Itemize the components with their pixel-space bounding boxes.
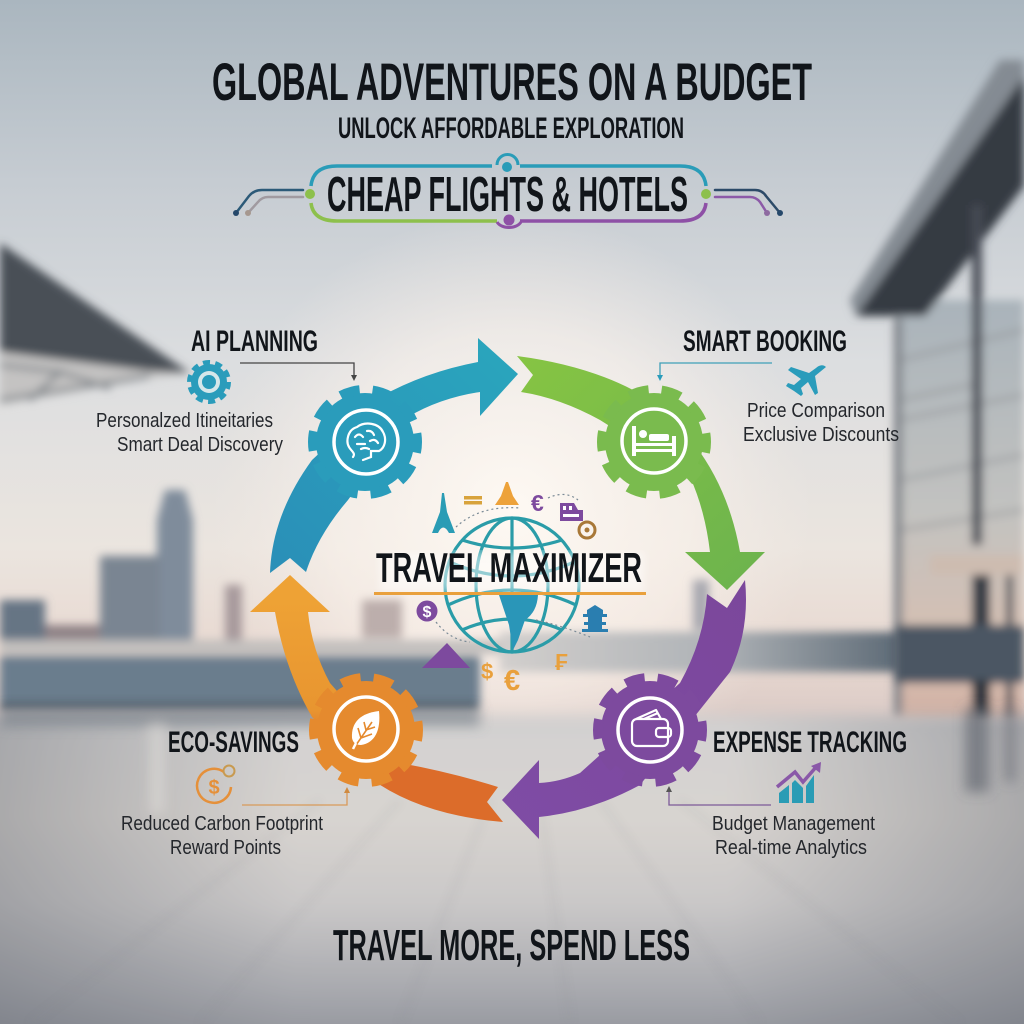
panel: eco-savings: Reward Points xyxy=(170,837,281,859)
gear: expense tracking xyxy=(598,678,702,782)
subtitle: UNLOCK AFFORDABLE EXPLORATION xyxy=(338,112,684,145)
panel: expense tracking: Budget Management xyxy=(712,813,875,835)
globe xyxy=(445,518,579,652)
panel: eco-savings: Reduced Carbon Footprint xyxy=(121,813,323,835)
panel: AI planning: AI PLANNING xyxy=(191,325,318,358)
icon: coin xyxy=(579,522,595,538)
icon: wallet xyxy=(632,710,671,746)
panel: eco-savings xyxy=(121,726,350,859)
panel: eco-savings: ECO-SAVINGS xyxy=(168,726,299,759)
arrow: orange xyxy=(250,575,503,822)
panel: smart booking xyxy=(657,325,899,446)
gear: eco-savings xyxy=(314,678,418,782)
icon: coins xyxy=(197,766,234,803)
flight paths xyxy=(436,494,590,642)
panel: smart booking: Price Comparison xyxy=(747,400,885,422)
panel: expense tracking: Real-time Analytics xyxy=(715,837,867,859)
connector xyxy=(669,791,771,805)
icon: euro purple: € xyxy=(531,490,544,516)
centre haze xyxy=(380,552,644,592)
gear: AI planning xyxy=(313,390,417,494)
orange rule xyxy=(374,592,646,595)
banner: cheap flights and hotels xyxy=(233,154,783,228)
panel: AI planning xyxy=(96,325,357,456)
icon: pagoda blue xyxy=(582,605,608,632)
icon: pagoda orange xyxy=(495,482,519,505)
icon: eiffel tower xyxy=(432,493,455,533)
banner: cheap flights and hotels: CHEAP FLIGHTS & HOTELS xyxy=(327,168,688,222)
gear: smart booking xyxy=(602,390,706,494)
icon: euro orange: € xyxy=(504,665,520,697)
icon: dollar coin: $ xyxy=(423,604,432,621)
icon: dollar: $ xyxy=(481,659,493,684)
panel: smart booking: SMART BOOKING xyxy=(683,325,847,358)
icon: small gear xyxy=(190,362,228,402)
icon: dollar coin xyxy=(416,600,438,622)
tagline: TRAVEL MORE, SPEND LESS xyxy=(333,921,690,970)
centre title: TRAVEL MAXIMIZER xyxy=(376,544,642,591)
cycle ring xyxy=(250,338,765,839)
icon: growth chart xyxy=(777,762,821,803)
icon: franc: ₣ xyxy=(555,649,568,675)
icon: coins: $ xyxy=(208,777,220,799)
icon: plane xyxy=(786,365,826,396)
icon: bed xyxy=(632,426,676,456)
arrow: teal xyxy=(270,338,518,573)
icon: bars xyxy=(464,496,482,504)
connector xyxy=(660,363,772,376)
panel: AI planning: Smart Deal Discovery xyxy=(117,434,283,456)
icon: leaf xyxy=(352,711,379,749)
centre: travel maximizer xyxy=(374,482,646,697)
connector xyxy=(240,363,354,376)
icon: pyramid xyxy=(422,643,470,668)
arrow: purple xyxy=(502,580,746,839)
panel: AI planning: Personalzed Itineitaries xyxy=(96,410,273,432)
panel: expense tracking xyxy=(666,726,907,859)
panel: smart booking: Exclusive Discounts xyxy=(743,424,899,446)
panel: expense tracking: EXPENSE TRACKING xyxy=(713,726,907,759)
icon: brain head xyxy=(348,424,385,460)
connector xyxy=(242,792,347,805)
arrow: green xyxy=(517,356,765,590)
icon: hotel xyxy=(560,503,583,521)
